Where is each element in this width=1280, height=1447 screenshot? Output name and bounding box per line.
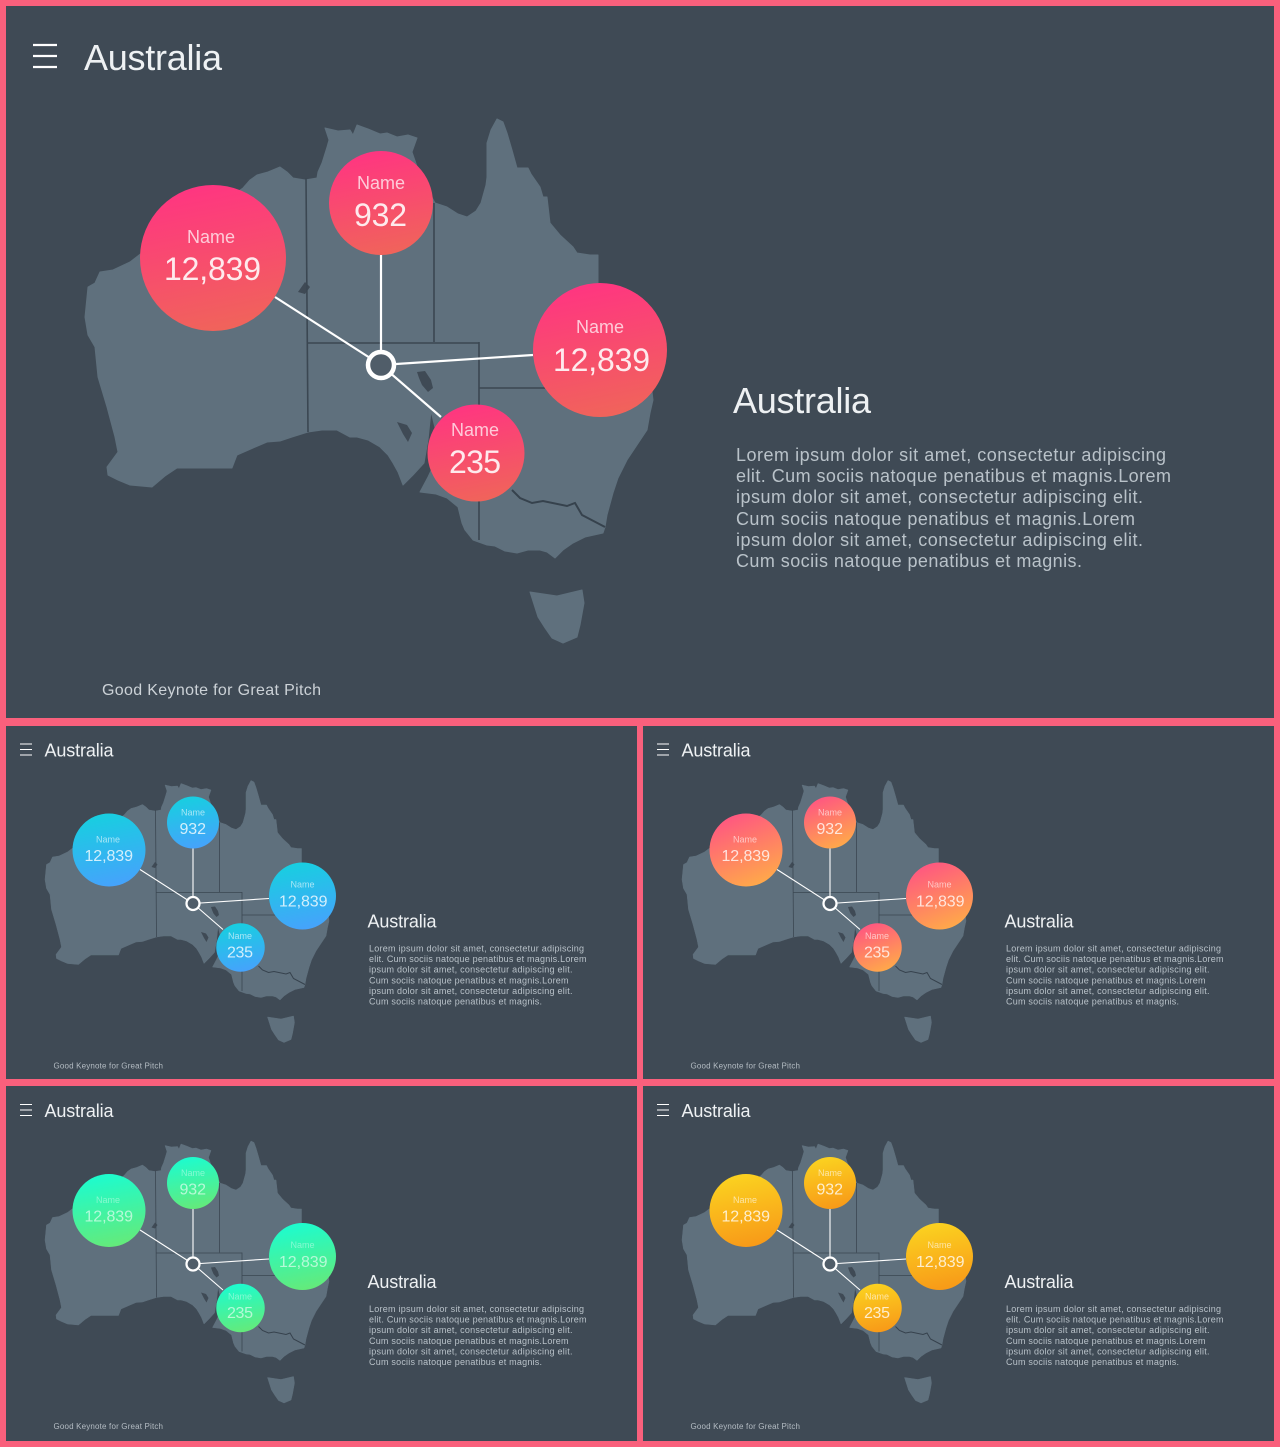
bubble: 235 [216,923,265,972]
bubble: 235: 235 [864,944,890,962]
icon: menu [20,1104,32,1116]
connector lines [140,848,269,930]
body text: Cum sociis natoque penatibus et magnis.Lorem [736,509,1135,529]
hub [186,1258,200,1270]
body text: ipsum dolor sit amet, consectetur adipiscing elit. [369,1346,572,1356]
title: Australia [682,740,751,760]
bubble: 12,839 east [906,862,973,930]
body text: Cum sociis natoque penatibus et magnis.Lorem [1006,1336,1206,1346]
panel: orange slide [643,726,1274,1079]
title: Australia [682,1101,751,1121]
map of Australia [45,780,329,1042]
body text: elit. Cum sociis natoque penatibus et magnis.Lorem [369,1314,586,1324]
hub [186,897,200,910]
bubble: 932: 932 [180,1182,206,1198]
body text: elit. Cum sociis natoque penatibus et magnis.Lorem [1006,954,1224,964]
body text: Cum sociis natoque penatibus et magnis.Lorem [369,1336,568,1346]
panel: main pink slide [6,6,1274,718]
bubble: 932 [167,1157,219,1209]
bubble: 235 [853,923,902,972]
footer: Good Keynote for Great Pitch [690,1062,800,1070]
map of Australia [45,1141,329,1403]
bubble: 932 [329,151,433,255]
body text: Cum sociis natoque penatibus et magnis. [736,551,1082,571]
bubble: 12,839 east [269,862,336,930]
bubble: 12,839 east [906,1223,973,1290]
body text [1006,944,1224,1006]
panel: blue slide [6,726,637,1079]
connector lines [777,1209,906,1290]
bubble: 12,839 west: 12,839 [164,251,261,287]
map of Australia [682,780,966,1042]
panel: yellow slide [643,1086,1274,1441]
hub [824,1258,836,1270]
panel: green slide [6,1086,637,1441]
bubble: 235: Name [865,1292,889,1302]
body text: Lorem ipsum dolor sit amet, consectetur adipiscing [369,944,584,954]
bubble: 932: 932 [816,1182,843,1198]
bubble: 932 [804,796,856,848]
title: Australia [84,37,223,78]
title: Australia [44,740,114,760]
bubble: 932: Name [181,1168,205,1178]
bubble: 932: 932 [354,197,407,233]
body text: elit. Cum sociis natoque penatibus et magnis.Lorem [736,466,1171,486]
bubble: 235 [428,404,524,502]
bubble: 12,839 west: 12,839 [722,1208,770,1226]
heading: Australia [368,1272,437,1292]
bubble: 12,839 west [710,1174,782,1247]
body text: elit. Cum sociis natoque penatibus et magnis.Lorem [369,954,586,964]
body text: Cum sociis natoque penatibus et magnis.Lorem [369,976,568,986]
heading: Australia [368,912,437,932]
hub [824,897,836,910]
bubble: 932 [804,1157,856,1209]
bubble: 12,839 west [140,185,286,331]
bubble: 235 [853,1284,902,1332]
bubble: 12,839 west: Name [733,1195,757,1205]
body text: ipsum dolor sit amet, consectetur adipiscing elit. [1006,964,1210,974]
icon: menu [657,1104,669,1116]
bubble: 12,839 east: Name [928,880,952,890]
footer: Good Keynote for Great Pitch [690,1422,800,1431]
bubble: 932: 932 [816,821,843,838]
bubble: 235: Name [865,931,889,941]
footer: Good Keynote for Great Pitch [102,682,321,699]
bubble: 235: 235 [864,1305,890,1322]
bubble: 235: 235 [449,444,501,480]
body text [1006,1304,1224,1367]
body text: elit. Cum sociis natoque penatibus et magnis.Lorem [1006,1314,1224,1324]
body text: Lorem ipsum dolor sit amet, consectetur adipiscing [736,445,1166,465]
heading: Australia [733,380,872,421]
bubble: 12,839 west: 12,839 [84,848,133,865]
bubble: 12,839 east [533,283,667,417]
body text: Cum sociis natoque penatibus et magnis. [369,1357,542,1367]
body text [369,944,586,1006]
bubble: 12,839 east: 12,839 [553,342,650,378]
bubble: 12,839 east: Name [576,317,624,337]
bubble: 12,839 east [269,1223,336,1290]
body text: ipsum dolor sit amet, consectetur adipiscing elit. [736,530,1143,550]
icon: menu [20,744,32,755]
body text: ipsum dolor sit amet, consectetur adipiscing elit. [736,487,1143,507]
bubble: 932: Name [818,808,842,818]
bubble: 12,839 west [72,814,146,886]
connector lines [777,848,906,930]
bubble: 932 [167,796,219,848]
bubble: 12,839 west: 12,839 [722,848,770,865]
body text [736,445,1171,571]
icon: menu [657,744,669,755]
bubble: 12,839 west [72,1174,146,1247]
bubble: 12,839 west: Name [96,1195,120,1205]
hub [368,352,394,378]
bubble: 12,839 west [710,814,782,886]
bubble: 12,839 east: 12,839 [916,894,965,910]
body text: ipsum dolor sit amet, consectetur adipiscing elit. [369,1325,572,1335]
bubble: 932: 932 [180,821,206,838]
bubble: 932: Name [357,173,405,193]
bubble: 235: 235 [227,944,253,962]
footer: Good Keynote for Great Pitch [54,1422,163,1431]
connector lines [275,255,533,417]
body text: Lorem ipsum dolor sit amet, consectetur adipiscing [1006,944,1221,954]
map of Australia [85,119,653,643]
heading: Australia [1004,912,1074,932]
body text: Cum sociis natoque penatibus et magnis. [1006,996,1179,1006]
bubble: 235: Name [228,1292,252,1302]
map of Australia [682,1141,966,1403]
body text: Cum sociis natoque penatibus et magnis.Lorem [1006,976,1206,986]
body text: ipsum dolor sit amet, consectetur adipiscing elit. [369,964,572,974]
title: Australia [44,1101,114,1121]
body text: Lorem ipsum dolor sit amet, consectetur adipiscing [1006,1304,1221,1314]
connector lines [140,1209,269,1290]
body text: ipsum dolor sit amet, consectetur adipiscing elit. [1006,1346,1210,1356]
bubble: 12,839 west: Name [187,227,235,247]
bubble: 12,839 west: Name [733,834,757,844]
body text: ipsum dolor sit amet, consectetur adipiscing elit. [1006,986,1210,996]
icon: menu [33,45,57,67]
bubble: 12,839 east: Name [290,880,314,890]
bubble: 12,839 east: Name [290,1240,314,1250]
body text: Cum sociis natoque penatibus et magnis. [369,996,542,1006]
bubble: 235 [216,1284,265,1332]
bubble: 12,839 east: 12,839 [279,894,328,910]
bubble: 932: Name [181,808,205,818]
body text: ipsum dolor sit amet, consectetur adipiscing elit. [369,986,572,996]
bubble: 235: Name [228,931,252,941]
bubble: 235: Name [451,420,499,440]
bubble: 12,839 east: 12,839 [279,1254,328,1271]
heading: Australia [1004,1272,1074,1292]
bubble: 12,839 east: 12,839 [916,1254,965,1271]
bubble: 235: 235 [227,1305,253,1322]
body text: Lorem ipsum dolor sit amet, consectetur adipiscing [369,1304,584,1314]
body text: Cum sociis natoque penatibus et magnis. [1006,1357,1179,1367]
bubble: 12,839 west: Name [96,834,120,844]
footer: Good Keynote for Great Pitch [54,1062,163,1070]
bubble: 12,839 east: Name [928,1240,952,1250]
bubble: 12,839 west: 12,839 [84,1208,133,1226]
body text: ipsum dolor sit amet, consectetur adipiscing elit. [1006,1325,1210,1335]
bubble: 932: Name [818,1168,842,1178]
body text [369,1304,586,1367]
